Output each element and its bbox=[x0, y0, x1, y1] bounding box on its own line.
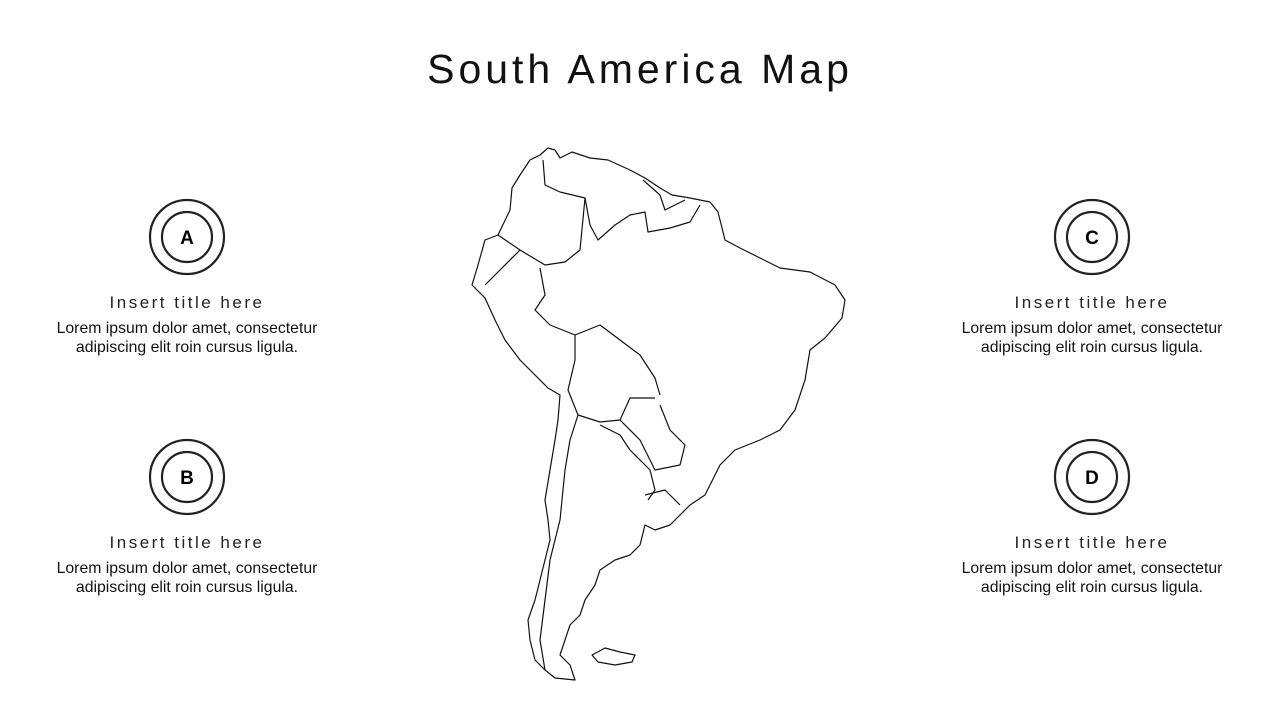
text C: adipiscing elit roin cursus ligula. bbox=[981, 339, 1203, 356]
title C: Insert title here bbox=[1015, 293, 1169, 312]
text C: Lorem ipsum dolor amet, consectetur bbox=[962, 320, 1222, 337]
text B bbox=[57, 560, 318, 596]
title D: Insert title here bbox=[1015, 533, 1169, 552]
icon: circle A bbox=[148, 198, 226, 276]
text D bbox=[962, 560, 1222, 596]
item D bbox=[962, 438, 1222, 596]
item C bbox=[962, 198, 1222, 356]
icon: circle C bbox=[1054, 198, 1130, 276]
text B: adipiscing elit roin cursus ligula. bbox=[76, 579, 298, 596]
title B: Insert title here bbox=[110, 533, 264, 552]
text B: Lorem ipsum dolor amet, consectetur bbox=[57, 560, 317, 577]
icon: circle C: C bbox=[1085, 228, 1099, 249]
item B bbox=[57, 438, 318, 596]
text A bbox=[57, 320, 318, 356]
text A: Lorem ipsum dolor amet, consectetur bbox=[57, 320, 317, 337]
icon: circle A: A bbox=[180, 228, 194, 249]
title: South America Map bbox=[427, 46, 853, 92]
icon: circle D bbox=[1054, 438, 1130, 516]
title A: Insert title here bbox=[110, 293, 264, 312]
text A: adipiscing elit roin cursus ligula. bbox=[76, 339, 298, 356]
icon: circle B: B bbox=[180, 468, 194, 489]
item A bbox=[57, 198, 318, 356]
icon: circle D: D bbox=[1085, 468, 1099, 489]
text C bbox=[962, 320, 1222, 356]
text D: Lorem ipsum dolor amet, consectetur bbox=[962, 560, 1222, 577]
icon: circle B bbox=[148, 438, 226, 516]
text D: adipiscing elit roin cursus ligula. bbox=[981, 579, 1203, 596]
